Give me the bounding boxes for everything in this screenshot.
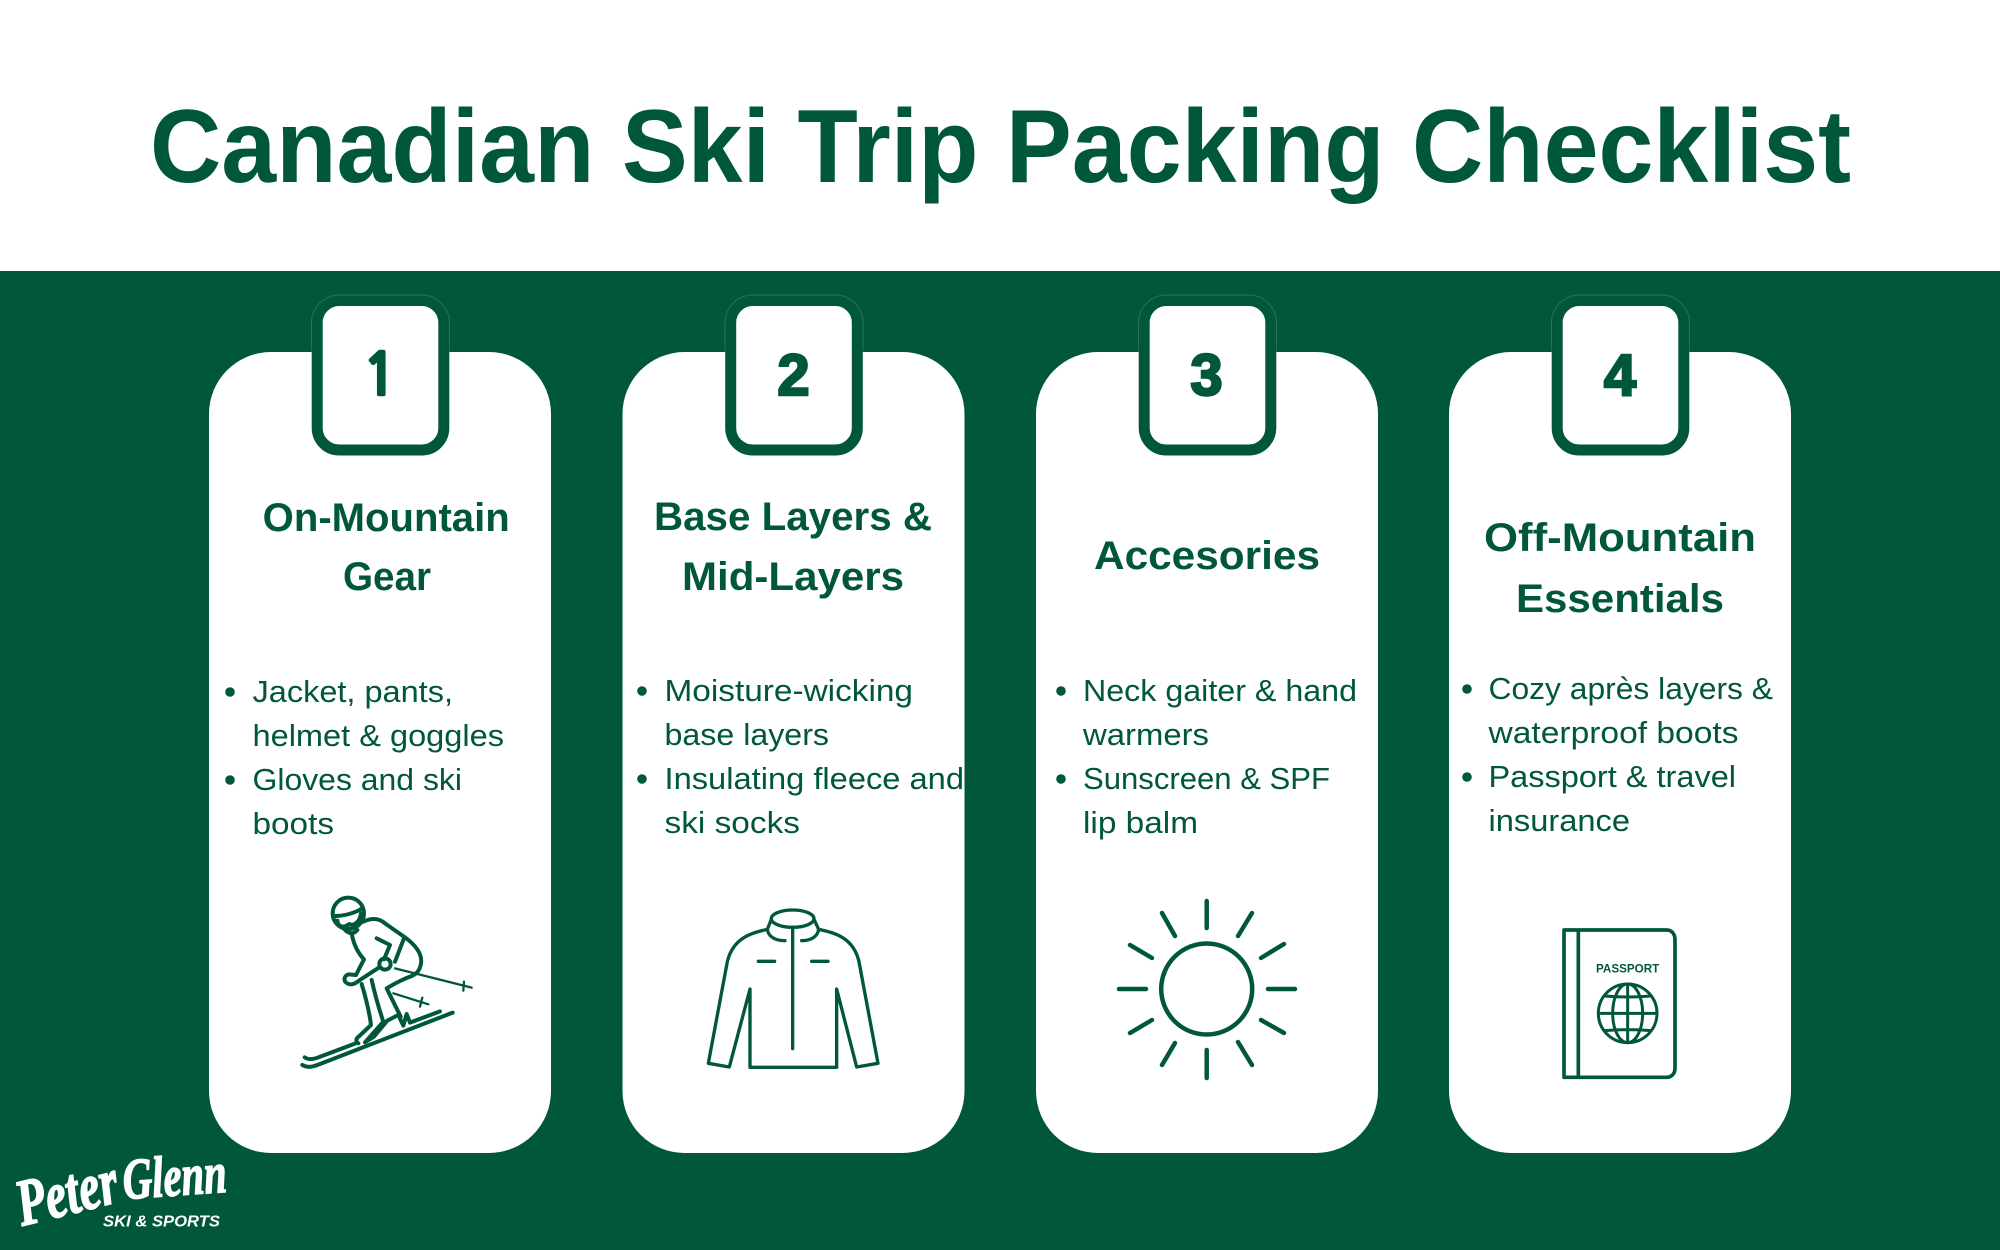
checklist: off-mountain essentials bbox=[1462, 671, 1773, 838]
heading: off-mountain essentials: Essentials bbox=[1516, 577, 1724, 621]
icon: skier bbox=[302, 898, 472, 1067]
logo: Peter Glenn Ski & Sports: Peter bbox=[7, 1145, 126, 1241]
heading: base layers and mid-layers bbox=[654, 495, 932, 599]
heading: base layers and mid-layers: Mid-Layers bbox=[682, 555, 904, 599]
checklist: base layers and mid-layers bbox=[637, 673, 964, 840]
icon: jacket bbox=[708, 910, 878, 1067]
panel: accessories bbox=[1036, 295, 1378, 1153]
checklist: base layers and mid-layers: Insulating fleece and bbox=[664, 761, 964, 796]
logo: Peter Glenn Ski & Sports: SKI & SPORTS bbox=[103, 1214, 221, 1230]
number badge 3: 3 bbox=[1190, 343, 1223, 408]
number badge 1 bbox=[312, 295, 450, 450]
checklist: on-mountain gear: boots bbox=[252, 806, 334, 841]
checklist: base layers and mid-layers: Moisture-wicking bbox=[664, 673, 913, 708]
checklist: accessories: Neck gaiter & hand bbox=[1083, 673, 1357, 708]
checklist: off-mountain essentials: insurance bbox=[1488, 803, 1630, 838]
checklist: on-mountain gear: Jacket, pants, bbox=[252, 674, 453, 709]
panel: base layers and mid-layers bbox=[622, 295, 964, 1153]
icon: passport bbox=[1564, 930, 1675, 1077]
heading: off-mountain essentials: Off-Mountain bbox=[1484, 516, 1756, 560]
number badge 4 bbox=[1552, 295, 1690, 450]
title: Canadian Ski Trip Packing Checklist bbox=[150, 89, 1851, 205]
number badge 2: 2 bbox=[777, 343, 810, 408]
checklist: on-mountain gear: helmet & goggles bbox=[252, 718, 504, 753]
checklist: accessories bbox=[1056, 673, 1357, 840]
checklist: off-mountain essentials: waterproof boots bbox=[1487, 715, 1738, 750]
heading: on-mountain gear: Gear bbox=[343, 555, 431, 599]
heading: off-mountain essentials bbox=[1484, 516, 1756, 621]
panel: on-mountain gear bbox=[209, 295, 551, 1153]
icon: passport: PASSPORT bbox=[1596, 962, 1659, 975]
checklist: base layers and mid-layers: base layers bbox=[664, 717, 829, 752]
checklist: off-mountain essentials: Cozy après layers & bbox=[1488, 671, 1773, 706]
checklist: accessories: warmers bbox=[1082, 717, 1209, 752]
checklist: accessories: Sunscreen & SPF bbox=[1083, 761, 1330, 796]
number badge 1: 1 bbox=[362, 346, 398, 404]
icon: sun bbox=[1119, 901, 1295, 1078]
checklist: on-mountain gear: Gloves and ski bbox=[252, 762, 462, 797]
checklist: base layers and mid-layers: ski socks bbox=[664, 805, 800, 840]
checklist: on-mountain gear bbox=[225, 674, 504, 841]
logo: Peter Glenn Ski & Sports bbox=[7, 1140, 229, 1241]
panel: off-mountain essentials bbox=[1449, 295, 1791, 1153]
green background band bbox=[0, 271, 2000, 1250]
number badge 3 bbox=[1138, 295, 1276, 450]
checklist: off-mountain essentials: Passport & travel bbox=[1488, 759, 1736, 794]
heading: base layers and mid-layers: Base Layers & bbox=[654, 495, 932, 539]
heading: accesories: Accesories bbox=[1094, 534, 1320, 578]
logo: Peter Glenn Ski & Sports: Glenn bbox=[120, 1140, 229, 1212]
heading: on-mountain gear bbox=[263, 496, 510, 599]
checklist: accessories: lip balm bbox=[1083, 805, 1198, 840]
number badge 4: 4 bbox=[1604, 343, 1636, 408]
number badge 2 bbox=[725, 295, 863, 450]
heading: on-mountain gear: On-Mountain bbox=[263, 496, 510, 540]
